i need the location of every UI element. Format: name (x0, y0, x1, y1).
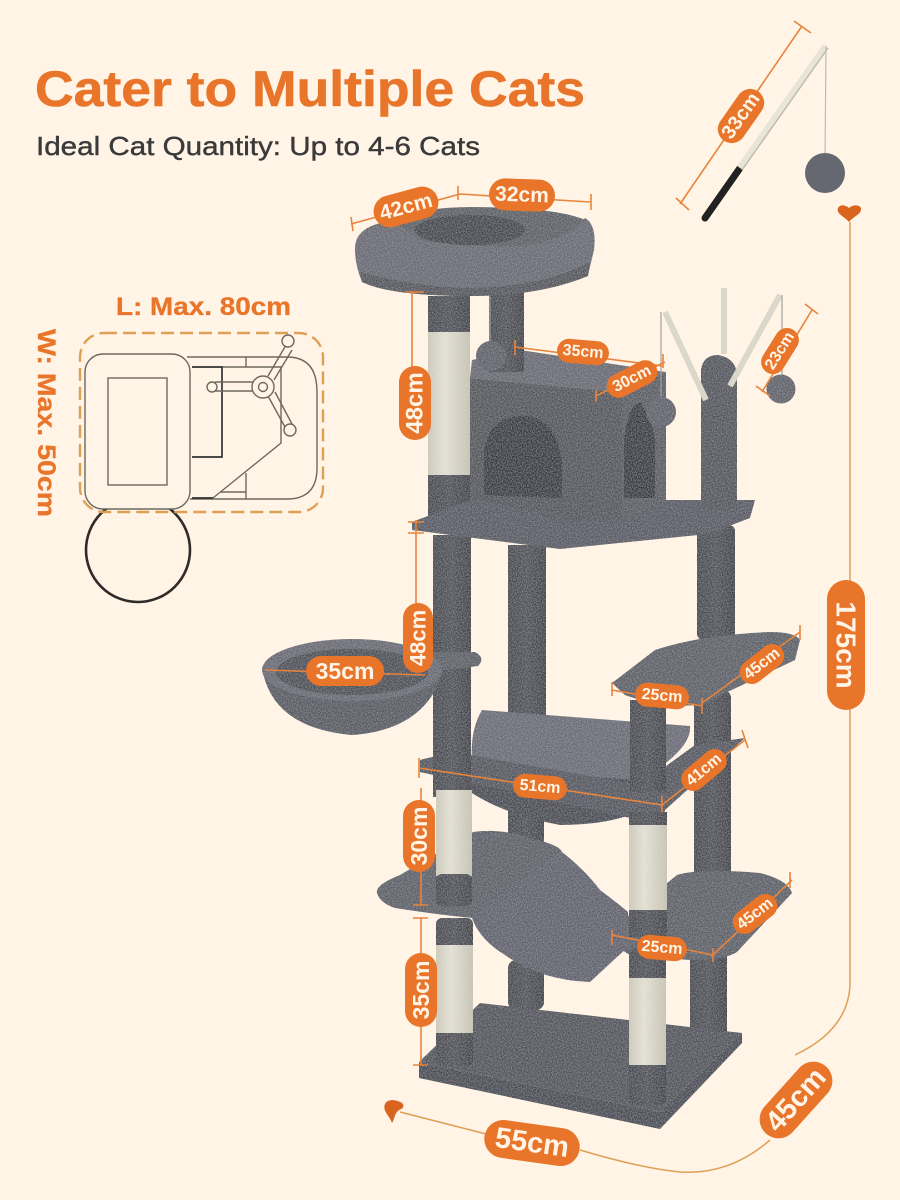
top section (428, 296, 470, 522)
top perch post (489, 290, 524, 372)
left post stack (428, 296, 473, 1066)
dashed limit box (80, 333, 323, 512)
heart marker top (838, 205, 861, 222)
lower left platform (377, 831, 562, 918)
basket rim (262, 639, 442, 701)
condo side (622, 372, 666, 520)
pill 45cm lower (728, 889, 782, 939)
pill 23cm: 23cm (762, 329, 798, 373)
lower hammock (472, 852, 630, 982)
condo front (470, 378, 622, 522)
pill 25cm upper: 25cm (641, 686, 683, 706)
pill 35cm condo (556, 338, 610, 366)
sisal arms (665, 288, 780, 400)
pill 35cm condo: 35cm (562, 342, 604, 362)
subtitle: Ideal Cat Quantity: Up to 4-6 Cats (36, 131, 480, 161)
front right post (629, 700, 667, 1105)
hanging basket (262, 639, 481, 735)
side arch (624, 402, 655, 498)
pill 41cm (676, 744, 732, 796)
pill 45cm upper: 45cm (741, 645, 783, 683)
pill 42cm: 42cm (377, 189, 435, 225)
dimension lines (265, 186, 818, 1065)
width limit label: W: Max. 50cm (32, 329, 60, 517)
pill 30cm post (403, 800, 435, 872)
overall size lines (400, 222, 850, 1172)
wand sisal (740, 46, 826, 168)
pill 48cm lower: 48cm (406, 610, 430, 666)
pill 32cm (488, 178, 556, 212)
pill 30cm condo (602, 356, 662, 402)
pill 42cm (370, 183, 442, 231)
front arch (484, 416, 562, 498)
upper hammock (420, 710, 745, 825)
middle section (433, 535, 471, 797)
top bed (355, 207, 595, 296)
pill 48cm upper (399, 366, 431, 440)
pill 35cm post (405, 953, 437, 1027)
footprint diagram (32, 293, 323, 602)
pill 48cm lower (403, 603, 433, 673)
toy post (665, 288, 780, 510)
heart marker bottom (384, 1100, 403, 1123)
pill 45cm depth: 45cm (759, 1062, 833, 1138)
length limit label: L: Max. 80cm (116, 293, 291, 321)
pill 51cm: 51cm (519, 777, 561, 797)
pill 45cm lower: 45cm (734, 895, 776, 933)
wand toy (676, 21, 845, 218)
pill 55cm: 55cm (493, 1122, 571, 1164)
pill 30cm condo: 30cm (610, 362, 654, 396)
wand string (825, 46, 826, 160)
condo roof (470, 350, 666, 392)
condo house (470, 350, 666, 522)
size pills (306, 83, 865, 1168)
pill 35cm basket: 35cm (316, 658, 374, 684)
wand handle (705, 168, 740, 218)
pill 25cm lower: 25cm (641, 938, 683, 958)
upper mid right platform (612, 632, 800, 706)
pill 48cm upper: 48cm (402, 372, 428, 434)
pill 25cm upper (634, 682, 690, 710)
top-view outline (85, 335, 317, 509)
pill 35cm basket (306, 656, 384, 686)
basket tab (432, 652, 481, 672)
pill 45cm depth (752, 1054, 840, 1146)
condo platform (412, 500, 755, 549)
far posts (508, 525, 735, 1042)
pill 41cm: 41cm (683, 750, 725, 790)
wand dimension (676, 21, 811, 210)
basket ring (86, 498, 190, 602)
lower right platform (610, 871, 792, 960)
pill 33cm (712, 83, 770, 149)
cat tree (262, 207, 800, 1129)
pill 51cm (512, 773, 568, 801)
pill 33cm: 33cm (717, 89, 765, 143)
pill 45cm upper (735, 639, 789, 689)
pill 175cm: 175cm (830, 601, 862, 689)
title: Cater to Multiple Cats (35, 61, 585, 117)
pill 23cm (757, 323, 803, 379)
side post (701, 355, 737, 510)
pill 25cm lower (636, 934, 688, 962)
bottom section (436, 918, 473, 1066)
pom-pom balls (476, 295, 796, 427)
pill 35cm post: 35cm (408, 961, 434, 1019)
basket bowl (262, 668, 443, 735)
pill 32cm: 32cm (495, 183, 549, 207)
pill 175cm (827, 580, 865, 710)
pill 30cm post: 30cm (406, 807, 432, 865)
base (419, 1003, 742, 1129)
pill 55cm (482, 1118, 582, 1168)
wand ball (805, 153, 845, 193)
